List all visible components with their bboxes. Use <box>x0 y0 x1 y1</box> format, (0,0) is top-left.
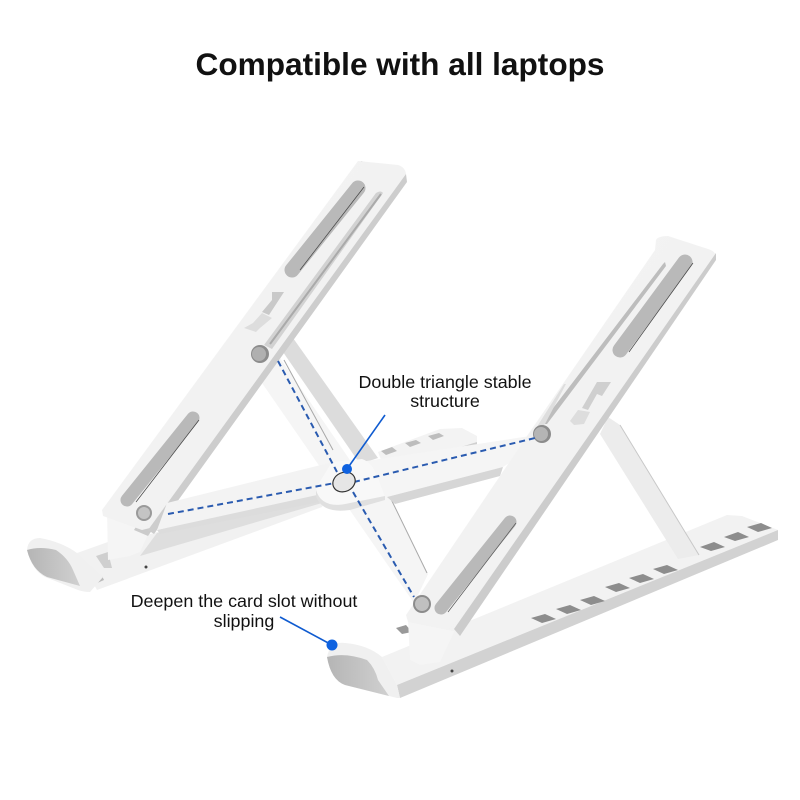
pivot pins <box>136 345 551 613</box>
callout: double triangle <box>342 372 532 474</box>
cross beam <box>157 436 545 534</box>
right latch <box>582 382 611 410</box>
title: Compatible with all laptops <box>196 46 604 82</box>
left foot lip <box>27 538 103 592</box>
left rail slot <box>264 192 383 349</box>
callout: card slot: Deepen the card slot without <box>131 591 357 611</box>
right upper pad <box>620 262 685 350</box>
right rear strut <box>600 417 699 559</box>
right lower pad <box>441 522 510 608</box>
right rail slot <box>541 262 666 424</box>
right hinge <box>408 620 455 665</box>
laptop stand illustration <box>27 161 778 698</box>
structure dashed lines <box>168 361 535 597</box>
left base <box>77 487 330 590</box>
center pivot pin <box>330 469 358 495</box>
upper left pad <box>292 188 358 270</box>
lower left pad <box>127 418 193 500</box>
left latch <box>262 292 284 315</box>
left top plate <box>102 161 407 536</box>
left front strut <box>262 358 428 603</box>
callout: card slot <box>131 591 357 650</box>
left hinge <box>107 510 150 560</box>
center pivot block <box>316 459 385 509</box>
right top plate <box>406 236 716 636</box>
callout: double triangle: Double triangle stable <box>358 372 532 392</box>
left front strut lower section <box>353 487 428 603</box>
right base with vent holes <box>382 515 778 698</box>
right foot lip <box>327 643 400 698</box>
rear left foot with vent holes <box>378 428 477 476</box>
callout: card slot: slipping <box>214 611 274 631</box>
callout: double triangle: structure <box>410 391 480 411</box>
left rear strut <box>283 338 378 464</box>
